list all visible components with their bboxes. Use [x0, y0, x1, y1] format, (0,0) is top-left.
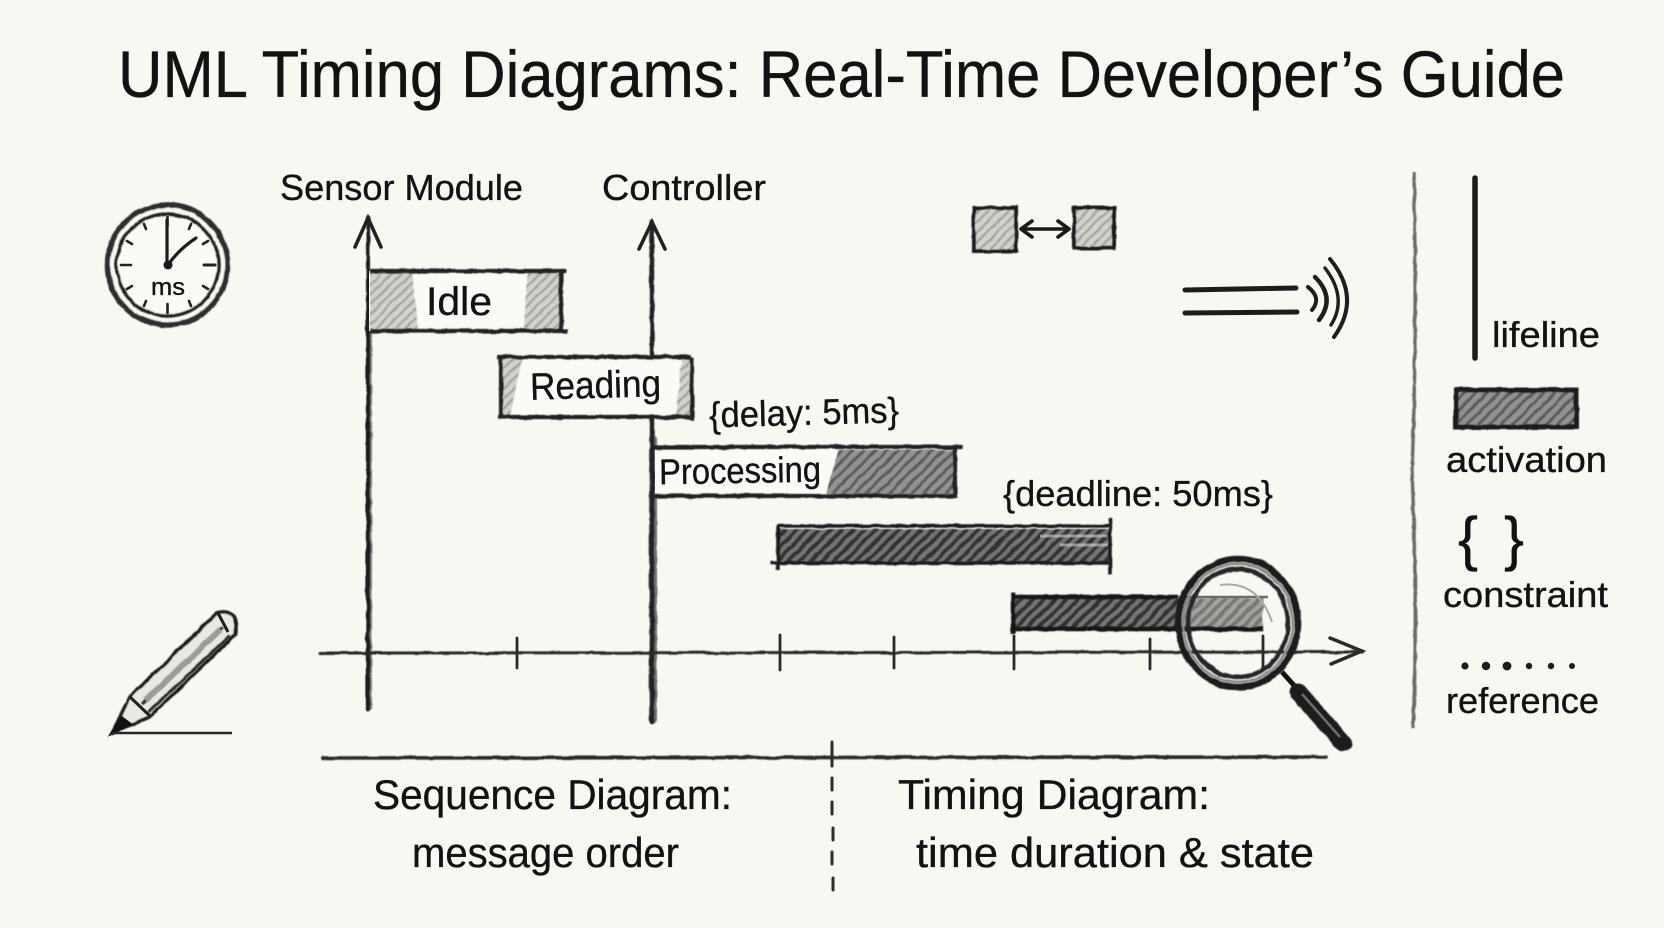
axis ticks [517, 635, 1263, 670]
state bar: Idle [369, 271, 568, 331]
legend: constraint [1443, 505, 1608, 615]
icon: magnifying glass [1178, 559, 1343, 743]
state bar: Reading [497, 357, 694, 420]
state label: Reading [529, 363, 662, 409]
lifeline: Controller [639, 222, 665, 722]
timeline axis [320, 635, 1362, 670]
icon: pencil [112, 612, 237, 733]
legend: constraint: { } [1458, 505, 1524, 572]
icon: signal lines and waves [1185, 259, 1347, 337]
legend divider [1412, 172, 1415, 728]
comparison: timing diagram: Timing Diagram: [898, 771, 1210, 818]
comparison: timing diagram: time duration & state [916, 829, 1314, 876]
icon: clock [108, 205, 228, 325]
legend: activation: activation [1446, 439, 1607, 480]
icon: linked squares [974, 208, 1114, 251]
lifeline header: Sensor Module: Sensor Module [280, 167, 523, 208]
legend: activation [1446, 390, 1607, 480]
state label: Idle [426, 280, 492, 324]
legend: reference [1446, 662, 1599, 721]
comparison: sequence diagram: message order [412, 829, 679, 876]
constraint: deadline: {deadline: 50ms} [1003, 473, 1273, 514]
comparison divider [323, 742, 1326, 890]
lifeline: Sensor Module [355, 218, 381, 710]
state bar: Processing [652, 447, 962, 498]
comparison: sequence diagram: Sequence Diagram: [373, 771, 732, 818]
lifeline header: Controller: Controller [602, 167, 766, 208]
constraint: delay: {delay: 5ms} [709, 389, 900, 435]
clock label: ms [151, 274, 185, 301]
state label: Processing [659, 449, 821, 492]
comparison: sequence diagram [373, 771, 732, 876]
legend: lifeline: lifeline [1492, 314, 1600, 355]
activation bar: under magnifier [1013, 592, 1268, 634]
legend: reference: reference [1446, 680, 1599, 721]
activation bar: dark [770, 518, 1110, 574]
legend: constraint: constraint [1443, 574, 1608, 615]
comparison: timing diagram [898, 771, 1314, 876]
title: UML Timing Diagrams: Real-Time Developer’s Guide [118, 37, 1565, 111]
